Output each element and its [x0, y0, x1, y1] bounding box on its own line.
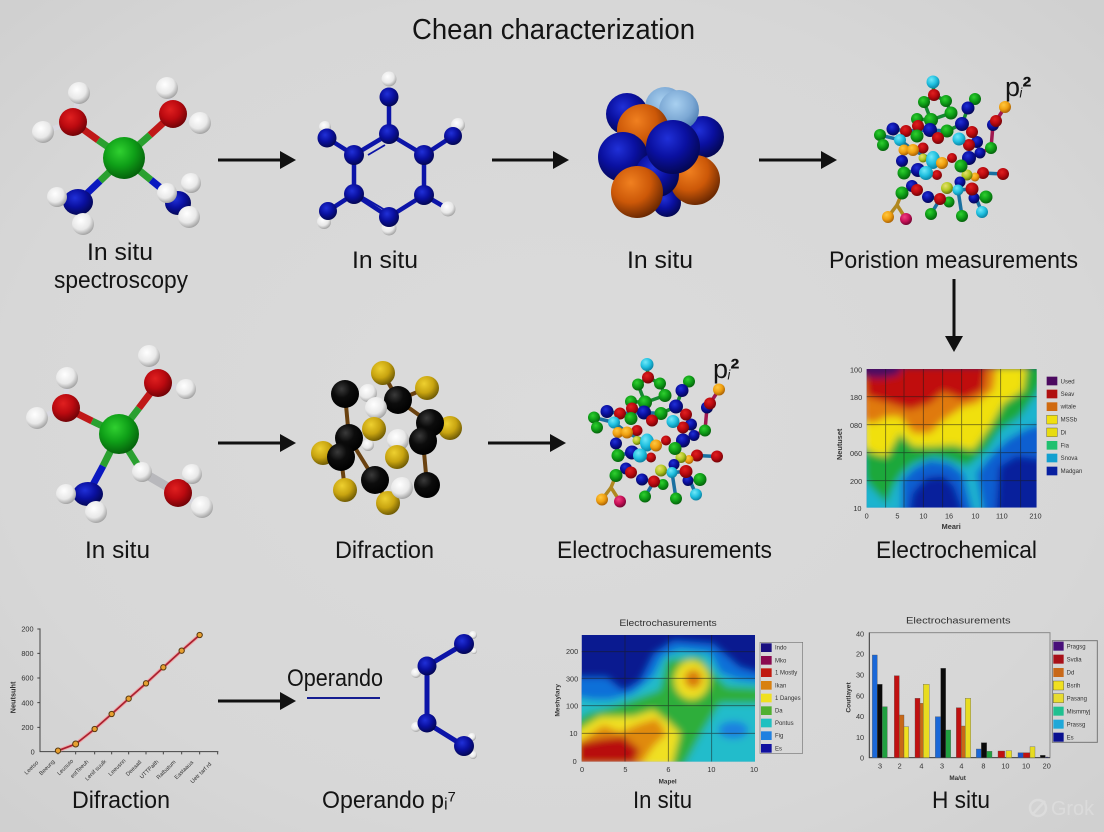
panel: h situ bar chart [846, 616, 1097, 814]
label: difraction: Difraction [72, 787, 170, 814]
heading: operando: Operando [287, 665, 383, 692]
axis labels: 10 [1022, 761, 1030, 770]
panel: in situ heatmap [554, 618, 803, 814]
legend [1052, 641, 1097, 742]
legend: 1 Mostly [775, 671, 797, 677]
axis labels: Ma/ut [949, 775, 967, 782]
axis labels: 10 [1001, 761, 1009, 770]
chart title: Electrochasurements [619, 618, 717, 628]
axis labels: 0 [860, 754, 864, 763]
axis labels [554, 647, 758, 785]
axis labels: 080 [850, 421, 862, 430]
label: in situ spectroscopy: In situ [87, 239, 153, 266]
axis labels: Neutuset [835, 428, 844, 460]
axis labels: 10 [707, 765, 715, 774]
bars [872, 655, 1048, 758]
axis labels: 400 [21, 698, 34, 707]
icon: multicolour ball-and-stick cluster [874, 76, 1011, 225]
axis labels: 060 [850, 449, 862, 458]
panel: difraction line chart [9, 625, 218, 814]
axis labels: 10 [919, 511, 927, 520]
axis labels: 210 [1029, 511, 1042, 520]
label: difraction: Difraction [335, 537, 434, 564]
axis labels: estTeeuh [70, 759, 90, 780]
axis labels: 0 [580, 765, 584, 774]
axis labels: Ratbatum [156, 759, 178, 781]
arrow [488, 434, 566, 452]
watermark: grok: Grok [1051, 798, 1095, 820]
axis labels: 4 [959, 761, 963, 770]
axis labels: Mapel [659, 778, 677, 785]
axis labels: 10 [853, 504, 861, 513]
axis labels: Eastaaua [174, 759, 196, 781]
axis labels: 3 [878, 761, 882, 770]
watermark: grok [1030, 798, 1095, 820]
legend: MSSb [1061, 418, 1078, 424]
axis labels [9, 625, 213, 785]
panel: difraction cage [311, 361, 462, 564]
axis labels: 10 [750, 765, 758, 774]
axis labels: 60 [856, 691, 864, 700]
axis labels: 5 [623, 765, 627, 774]
axis labels: Uetr tarf rd [190, 762, 213, 785]
legend: Ikan [775, 683, 786, 689]
legend: Seav [1061, 392, 1074, 398]
label: electrochemical: Electrochemical [876, 537, 1037, 564]
axis labels: 0 [865, 511, 869, 520]
legend: Da [775, 709, 783, 715]
label: in situ spectroscopy: spectroscopy [54, 267, 188, 294]
legend: Madgan [1061, 469, 1082, 475]
legend: Pragsg [1067, 644, 1086, 650]
arrow [218, 151, 296, 169]
axis labels: 0 [573, 757, 577, 766]
panel: in situ spectroscopy molecule [32, 77, 211, 294]
title: Chean characterization [412, 14, 695, 46]
axis labels: 2 [898, 761, 902, 770]
legend: Fig [775, 734, 783, 740]
axis labels: 3 [940, 761, 944, 770]
axis labels: Coutlayet [846, 682, 853, 713]
panel: in situ ring molecule [317, 72, 465, 274]
axis labels: Neutsuht [9, 681, 18, 713]
chart: bar chart [846, 616, 1097, 782]
legend: 1 Danges [775, 696, 801, 702]
axis labels: 200 [566, 647, 578, 656]
axis labels: 20 [856, 650, 864, 659]
axis labels: 200 [21, 723, 34, 732]
arrow [218, 434, 296, 452]
axis labels: 4 [919, 761, 923, 770]
panel: position measurements [829, 72, 1078, 274]
axis labels: 180 [850, 393, 862, 402]
label: in situ: In situ [633, 787, 692, 814]
axis labels: 10 [856, 733, 864, 742]
axis labels: Meshylary [554, 684, 561, 717]
axis labels [846, 630, 1051, 782]
legend [760, 642, 803, 753]
arrow [492, 151, 569, 169]
axis labels: Meari [942, 522, 961, 531]
panel: in situ molecule row two [26, 345, 213, 564]
axis labels: Leeusnn [108, 758, 127, 778]
label: operando p: Operando pᵢ⁷ [322, 787, 456, 814]
icon: metal complex molecule [32, 77, 211, 235]
legend: Svdia [1067, 658, 1082, 664]
axis labels: 40 [856, 630, 864, 639]
axis labels: 20 [1043, 761, 1051, 770]
icon: black and gold cage molecule [311, 361, 462, 515]
annotation: p squared: pᵢ² [1005, 72, 1031, 102]
axis labels: 10 [569, 729, 577, 738]
annotation: p squared: pᵢ² [713, 354, 739, 384]
legend: Prassg [1067, 722, 1085, 728]
axis labels: 300 [566, 674, 578, 683]
axis labels: 200 [21, 625, 34, 634]
chart title: Electrochasurements [906, 616, 1011, 626]
legend: Pasang [1067, 696, 1087, 702]
axis labels: 6 [666, 765, 670, 774]
legend: Fia [1061, 443, 1070, 449]
legend: Es [1067, 735, 1074, 741]
chart: heatmap [554, 618, 803, 785]
axis labels: 600 [21, 674, 34, 683]
axis labels: 110 [996, 511, 1008, 520]
legend: Mko [775, 658, 787, 664]
panel: operando [287, 631, 477, 814]
legend [1047, 377, 1082, 475]
axis labels: 200 [850, 477, 862, 486]
label: electrochasurements: Electrochasurements [557, 537, 772, 564]
axis labels: 5 [895, 511, 899, 520]
icon: zigzag chain molecule [411, 631, 477, 759]
axis labels: 100 [566, 702, 578, 711]
label: in situ: In situ [352, 247, 418, 274]
legend: Pontus [775, 721, 794, 727]
panel: electrochasurements cluster [557, 354, 772, 564]
legend: Snova [1061, 456, 1078, 462]
axis labels [835, 365, 1042, 531]
label: h situ: H situ [932, 787, 990, 814]
axis labels: 10 [971, 511, 979, 520]
legend: Dd [1067, 671, 1074, 677]
arrow: down [945, 279, 963, 352]
label: in situ: In situ [85, 537, 150, 564]
axis labels: Beeung [39, 759, 57, 777]
legend: Indo [775, 646, 787, 652]
chart: line chart [9, 625, 218, 785]
label: in situ: In situ [627, 247, 693, 274]
legend: Used [1061, 379, 1075, 385]
legend: witale [1060, 405, 1077, 411]
axis labels: 100 [850, 365, 862, 374]
axis labels: 0 [31, 747, 35, 756]
axis labels: 16 [945, 511, 953, 520]
icon: multicolour ball-and-stick cluster [588, 358, 725, 508]
axis labels: UTTPaith [139, 759, 160, 780]
legend: Es [775, 746, 782, 752]
chart: heatmap [835, 363, 1082, 531]
legend: Di [1061, 430, 1066, 436]
arrow [218, 692, 296, 710]
panel: electrochemical heatmap [835, 363, 1082, 564]
icon: hexagonal ring molecule [317, 72, 465, 236]
arrow [759, 151, 837, 169]
icon: sphere cluster [598, 87, 724, 218]
axis labels: 800 [21, 649, 34, 658]
legend: Mismmyj [1067, 709, 1090, 715]
label: poristion measurements: Poristion measurements [829, 247, 1078, 274]
axis labels: Deeaatl [125, 760, 143, 778]
axis labels: 30 [856, 671, 864, 680]
icon: metal complex molecule [26, 345, 213, 523]
axis labels: 8 [981, 761, 985, 770]
axis labels: Leusuto [57, 759, 75, 777]
axis labels: 40 [856, 712, 864, 721]
axis labels: Lenif suulk [85, 759, 108, 782]
axis labels: Leetso [24, 760, 40, 776]
underline [307, 697, 380, 699]
panel: in situ cluster [598, 87, 724, 274]
legend: Bsrih [1067, 684, 1080, 690]
